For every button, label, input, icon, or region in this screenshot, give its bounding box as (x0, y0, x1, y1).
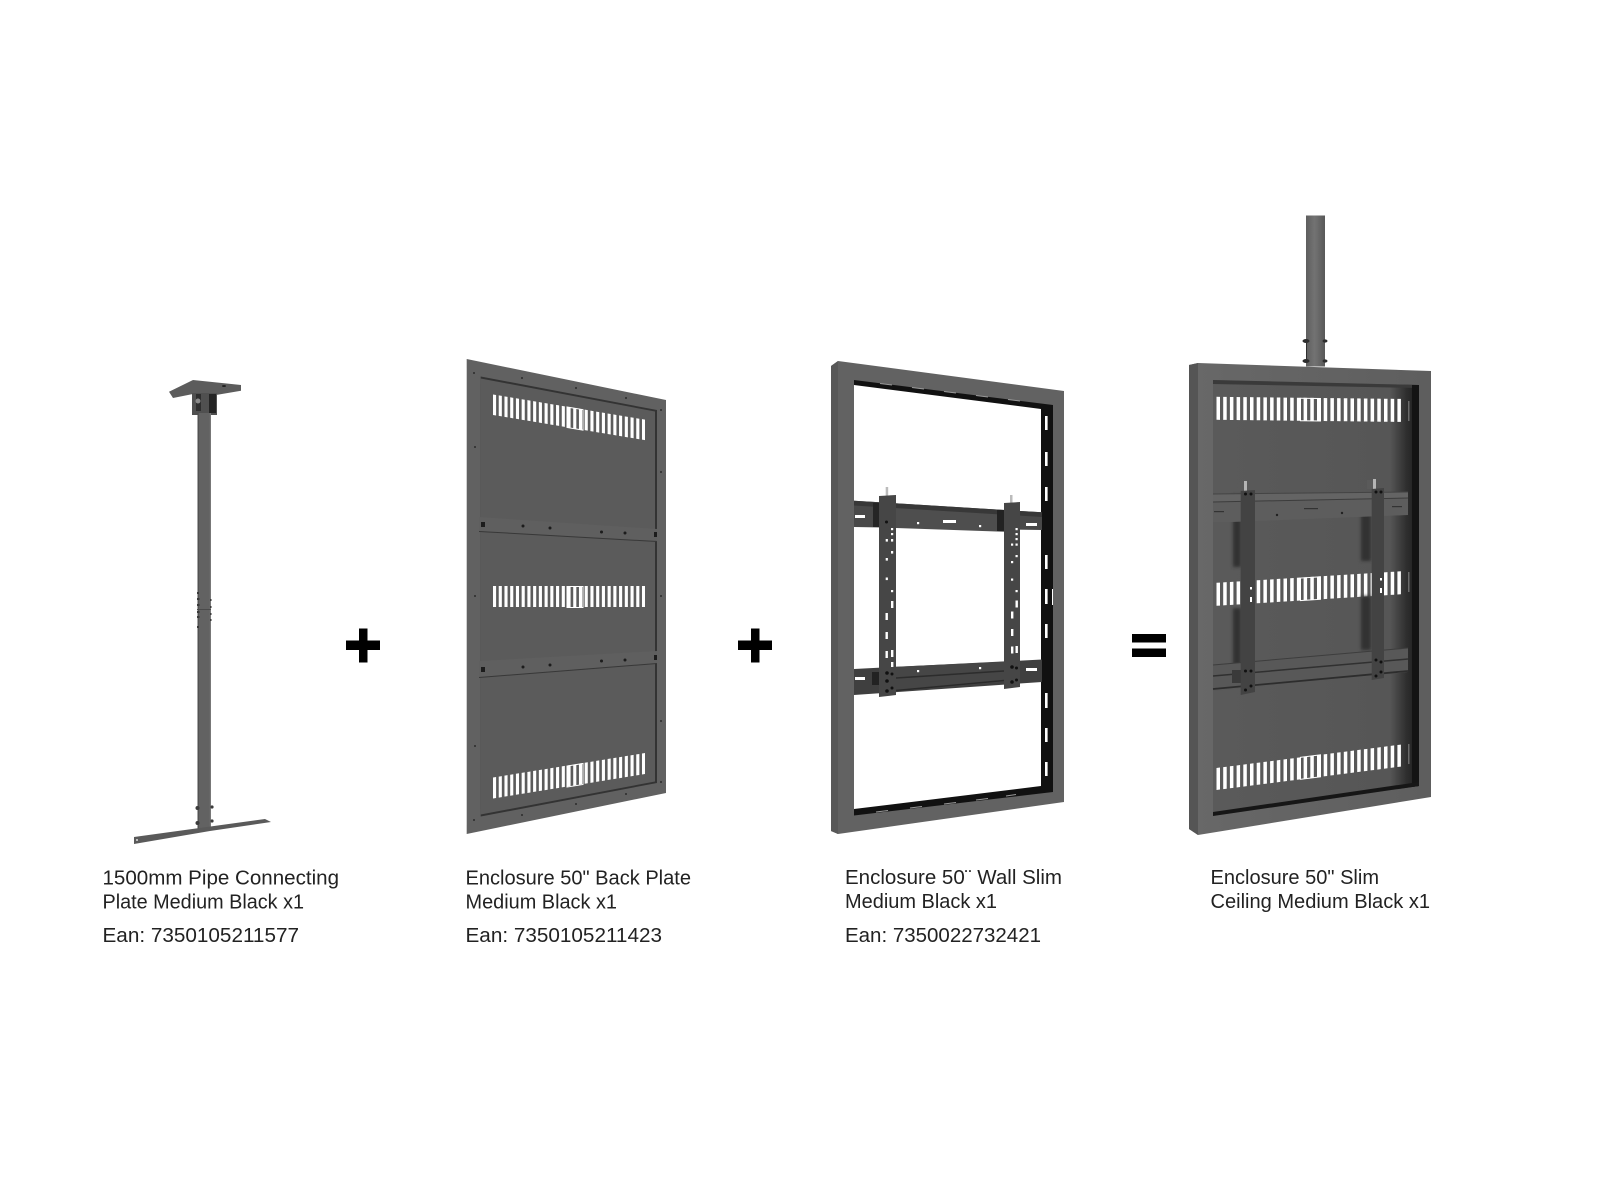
caption: assembled slim ceiling enclosure (1210, 867, 1430, 913)
back plate frame (467, 359, 666, 834)
caption: back plate (466, 868, 691, 947)
icon: connecting bar (134, 819, 271, 844)
assembled outer frame (1189, 363, 1431, 835)
right black band (1412, 385, 1419, 787)
top vent slots (493, 395, 645, 440)
icon: pole (196, 413, 214, 830)
frame opening (854, 385, 1041, 809)
left vertical plate (1238, 481, 1255, 695)
plus sign (738, 628, 772, 662)
middle vent (1216, 572, 1401, 606)
caption: wall slim enclosure: Ean: 7350022732421 (845, 925, 1041, 947)
top vent (1216, 397, 1401, 422)
enclosure outer frame (831, 361, 1064, 834)
caption: assembled slim ceiling enclosure: Enclosure 50" Slim (1210, 867, 1379, 889)
plate shadows (1233, 495, 1371, 666)
upper mounting strip (479, 517, 657, 542)
caption: pipe connecting plate: 1500mm Pipe Connecting (102, 868, 339, 890)
item: wall enclosure frame (831, 361, 1064, 834)
icon: ceiling plate (169, 380, 241, 415)
caption: assembled slim ceiling enclosure: Ceiling Medium Black x1 (1210, 891, 1430, 913)
lower rail (854, 660, 1042, 695)
plus sign (346, 628, 380, 662)
right vertical plate (1367, 479, 1384, 680)
caption: wall slim enclosure (845, 867, 1062, 947)
caption: back plate: Enclosure 50" Back Plate (466, 868, 691, 890)
item: pipe with connecting plate (134, 380, 271, 844)
upper rail (854, 501, 1042, 532)
frame screw holes (473, 372, 662, 821)
back plate inner panel (481, 376, 657, 816)
caption: wall slim enclosure: Enclosure 50¨ Wall Slim (845, 867, 1062, 889)
caption: wall slim enclosure: Medium Black x1 (845, 891, 997, 913)
caption: pipe connecting plate: Ean: 7350105211577 (102, 925, 299, 947)
caption: back plate: Ean: 7350105211423 (466, 925, 662, 947)
lower mounting strip (479, 651, 657, 678)
bottom black band (1213, 782, 1419, 816)
caption: pipe connecting plate: Plate Medium Black x1 (102, 892, 304, 914)
left vertical plate (879, 487, 896, 697)
caption: pipe connecting plate (102, 868, 339, 947)
middle vent slots (493, 586, 645, 608)
lower rail (1213, 648, 1408, 691)
right band slots (1045, 416, 1053, 776)
item: back plate (467, 359, 666, 834)
recessed back panel (1213, 380, 1419, 816)
upper rail (1213, 492, 1408, 522)
frame black inner band (854, 380, 1053, 816)
bottom vent slots (493, 754, 645, 799)
item: assembled slim ceiling enclosure (1189, 216, 1431, 835)
caption: back plate: Medium Black x1 (466, 892, 617, 914)
bottom vent (1216, 745, 1401, 790)
top and bottom band slots (876, 384, 1020, 812)
ceiling pipe (1302, 216, 1328, 366)
right vertical plate (1004, 495, 1020, 689)
equals sign (1132, 634, 1166, 657)
